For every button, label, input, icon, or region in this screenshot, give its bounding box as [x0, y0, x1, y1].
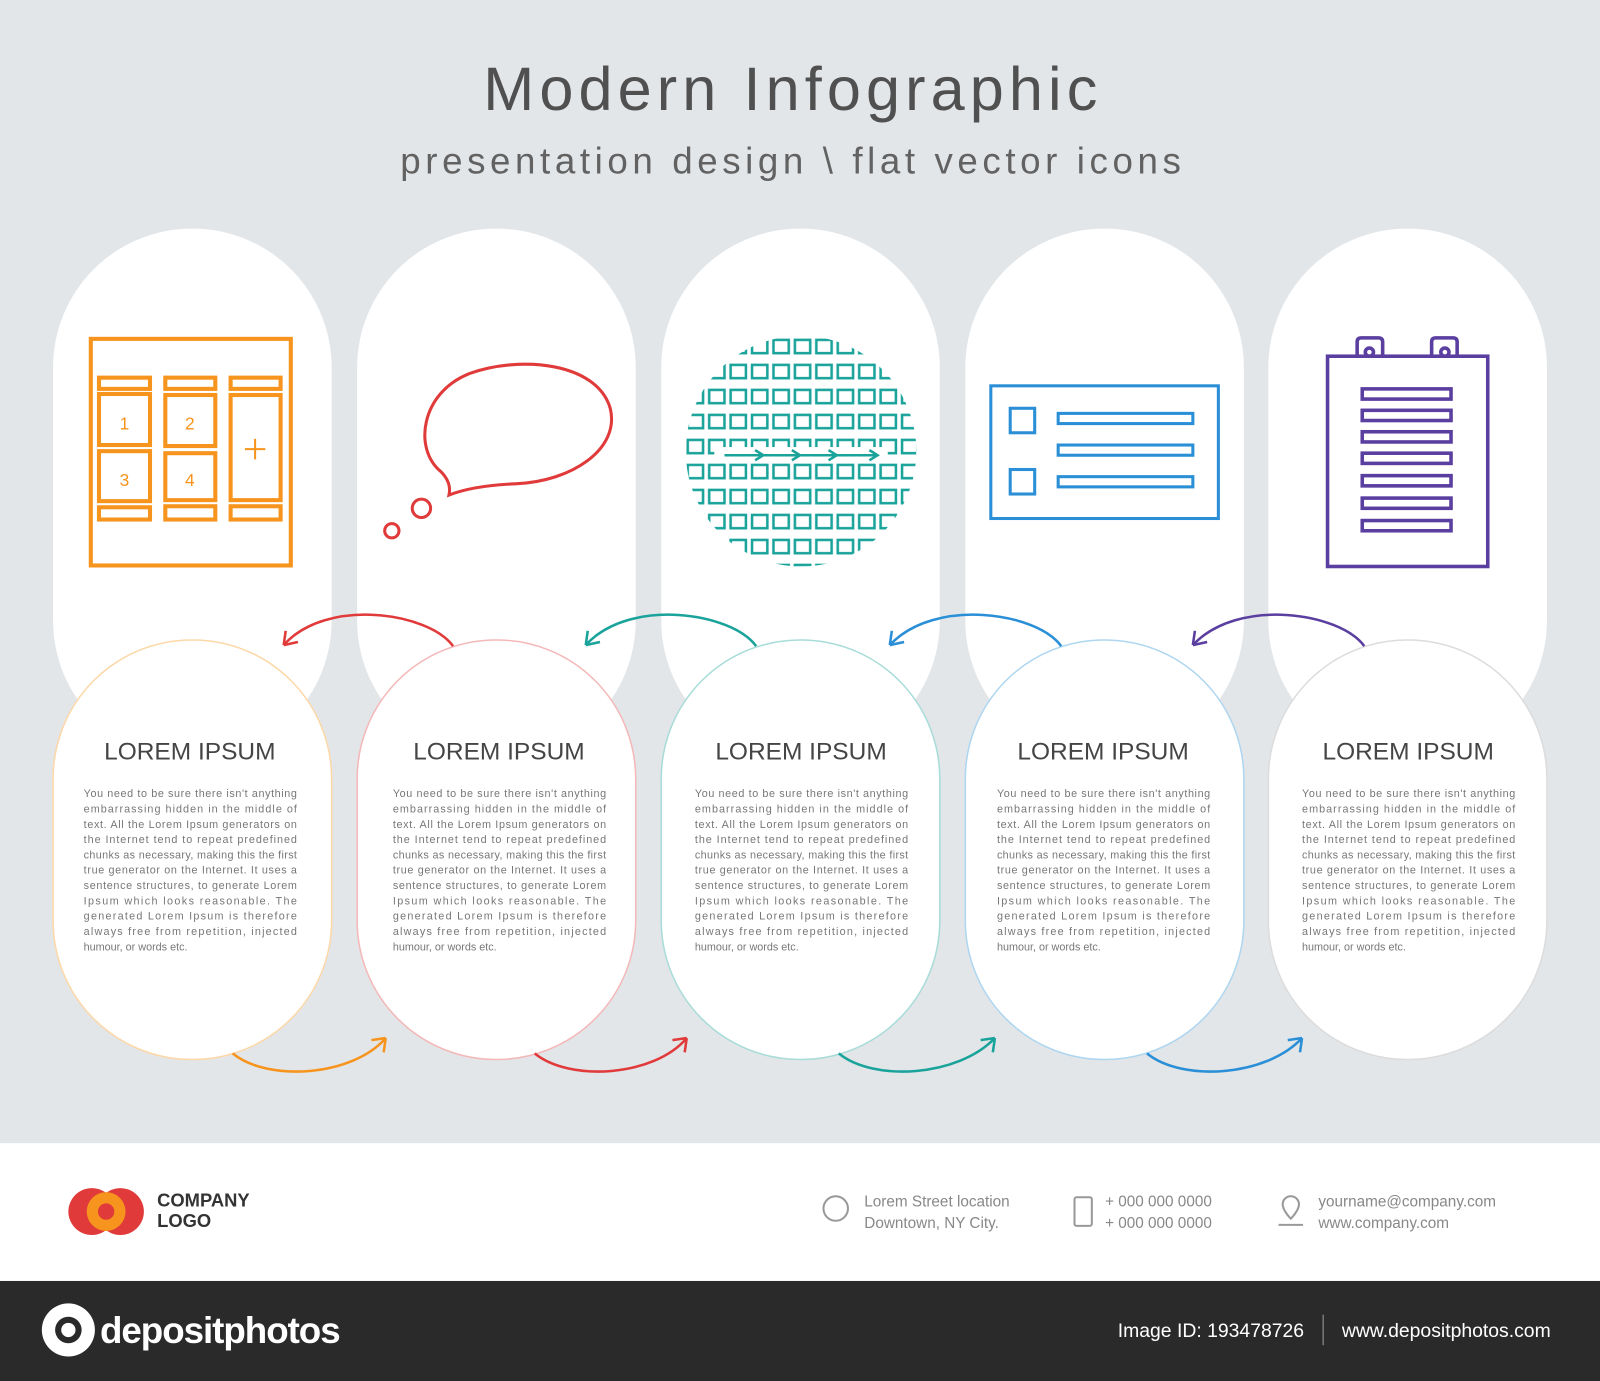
icon: kanban board: 3 [120, 470, 129, 490]
text 1 [84, 788, 298, 953]
company logo [68, 1188, 250, 1235]
dark bar [0, 1281, 1600, 1381]
contact: email: www.company.com [1317, 1215, 1449, 1232]
contact: phone: + 000 000 0000 [1105, 1193, 1212, 1210]
icon: list card [991, 386, 1218, 519]
contact: email [1279, 1193, 1496, 1232]
heading 3: LOREM IPSUM [715, 738, 887, 765]
footer white strip [0, 1143, 1600, 1281]
contact: address: Lorem Street location [864, 1193, 1010, 1210]
panel 5 [1268, 229, 1547, 1059]
depositphotos logo [42, 1303, 340, 1357]
contact: phone: + 000 000 0000 [1105, 1215, 1212, 1232]
icon: globe grid [686, 336, 916, 566]
icon: kanban board: 4 [185, 470, 195, 490]
panel 3 [661, 229, 940, 1059]
heading 2: LOREM IPSUM [413, 738, 585, 765]
company logo: COMPANY [157, 1189, 250, 1210]
icon: kanban board: 1 [120, 414, 129, 434]
contact: address: Downtown, NY City. [864, 1215, 999, 1232]
heading 1: LOREM IPSUM [104, 738, 275, 765]
subtitle: presentation design \ flat vector icons [400, 141, 1185, 182]
icon: speech bubble [385, 364, 612, 538]
text 4 [997, 788, 1211, 953]
heading 4: LOREM IPSUM [1017, 738, 1189, 765]
panel 4 [965, 229, 1244, 1059]
text 2 [393, 788, 607, 953]
contact: email: yourname@company.com [1318, 1193, 1496, 1210]
panel 2 [357, 229, 636, 1059]
image id: Image ID: 193478726 [1118, 1320, 1304, 1342]
panel 1 [53, 229, 332, 1059]
arrows: top [284, 615, 1364, 646]
text 3 [695, 788, 909, 953]
company logo: LOGO [157, 1210, 211, 1231]
contact: address [823, 1193, 1010, 1232]
arrows: bottom [233, 1038, 1302, 1072]
icon: kanban board [91, 339, 291, 565]
heading 5: LOREM IPSUM [1322, 738, 1494, 765]
depositphotos logo: depositphotos [100, 1310, 340, 1351]
title: Modern Infographic [483, 55, 1102, 123]
site url: www.depositphotos.com [1341, 1320, 1551, 1342]
contact: phone [1074, 1193, 1212, 1232]
text 5 [1302, 788, 1516, 953]
icon: clipboard [1328, 338, 1488, 566]
icon: kanban board: 2 [185, 414, 195, 434]
